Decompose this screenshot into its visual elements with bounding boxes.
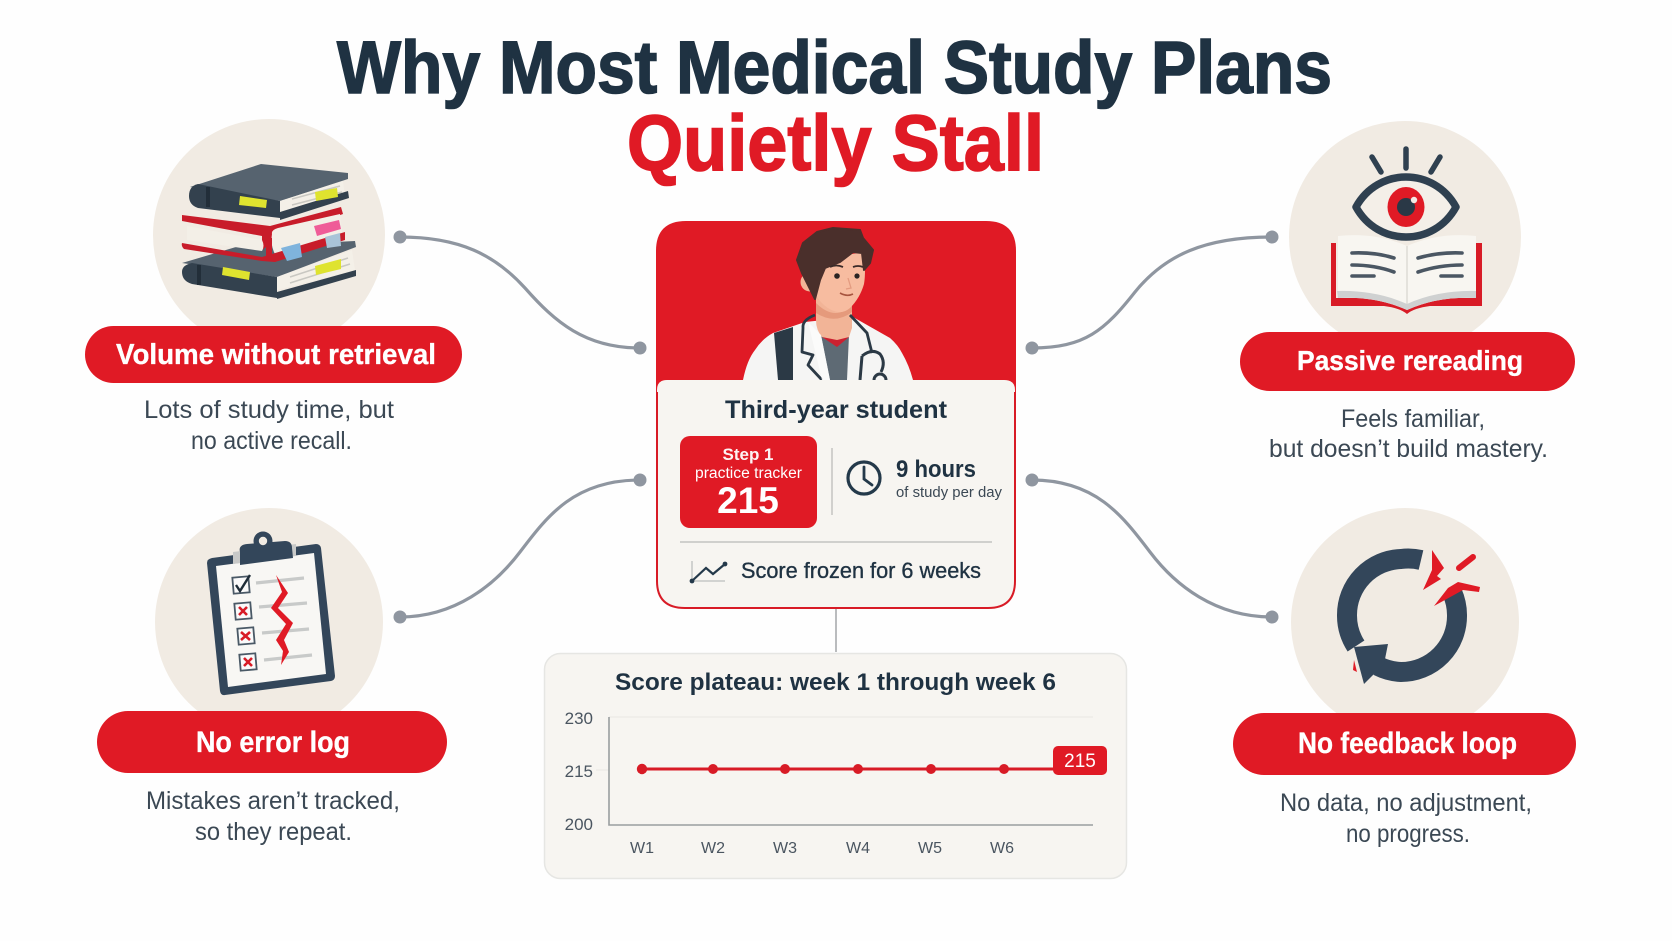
icon: clock	[848, 462, 880, 494]
icon: broken loop	[1291, 508, 1519, 736]
line chart: W6	[990, 840, 1014, 857]
description	[1269, 405, 1548, 463]
arrow: error log connector	[394, 474, 646, 624]
arrow: rereading connector	[1026, 230, 1278, 354]
label pill	[1233, 713, 1576, 775]
label pill: Volume without retrieval	[116, 339, 436, 371]
student name: Third-year student	[725, 396, 948, 424]
line chart: 230	[565, 709, 593, 728]
score tile	[680, 436, 817, 528]
score tile: Step 1	[722, 445, 774, 464]
label pill: Passive rereading	[1297, 345, 1523, 376]
icon: clipboard	[155, 508, 383, 736]
score tile: practice tracker	[695, 465, 802, 482]
line chart: 200	[565, 815, 593, 834]
icon: stack of books	[153, 119, 385, 351]
panel: no error log	[97, 508, 447, 846]
label pill	[1240, 332, 1575, 391]
icon: small line chart	[690, 561, 727, 583]
description: no active recall.	[191, 427, 352, 455]
line chart: W1	[630, 840, 654, 857]
score tile: 215	[717, 480, 779, 521]
icon: eye over open book	[1289, 121, 1521, 353]
panel: no feedback loop	[1233, 508, 1576, 848]
title	[337, 26, 1332, 187]
panel: volume without retrieval	[85, 119, 462, 455]
line chart: 215	[1064, 751, 1096, 772]
panel: student card	[656, 221, 1016, 608]
line chart	[565, 709, 1107, 857]
description: Feels familiar,	[1341, 405, 1485, 433]
description	[144, 396, 394, 455]
score frozen note: Score frozen for 6 weeks	[741, 558, 981, 583]
description: but doesn’t build mastery.	[1269, 435, 1548, 463]
label pill: No error log	[196, 726, 350, 759]
label pill	[85, 326, 462, 383]
description: no progress.	[1346, 820, 1470, 848]
line chart: W3	[773, 840, 797, 857]
label pill: No feedback loop	[1298, 727, 1517, 760]
arrow: card to chart	[835, 609, 837, 652]
description: No data, no adjustment,	[1280, 789, 1532, 817]
line chart: W5	[918, 840, 942, 857]
arrow: feedback connector	[1026, 474, 1278, 624]
line chart: W2	[701, 840, 725, 857]
line chart: 215	[565, 762, 593, 781]
description: Lots of study time, but	[144, 396, 394, 424]
red header	[656, 221, 1016, 395]
description	[146, 787, 400, 846]
title: Why Most Medical Study Plans	[337, 26, 1332, 109]
description: so they repeat.	[195, 818, 352, 846]
study hours: 9 hours	[896, 456, 976, 483]
arrow: volume connector	[394, 230, 646, 354]
title: Quietly Stall	[627, 98, 1044, 187]
chart title: Score plateau: week 1 through week 6	[615, 669, 1056, 696]
panel: score plateau chart	[544, 654, 1126, 878]
panel: passive rereading	[1240, 121, 1575, 463]
description	[1280, 789, 1532, 848]
study hours: of study per day	[896, 485, 1003, 501]
illustration: student doctor	[743, 228, 913, 380]
study hours	[896, 456, 1003, 501]
label pill	[97, 711, 447, 773]
description: Mistakes aren’t tracked,	[146, 787, 400, 815]
info panel	[657, 380, 1015, 608]
line chart: W4	[846, 840, 870, 857]
